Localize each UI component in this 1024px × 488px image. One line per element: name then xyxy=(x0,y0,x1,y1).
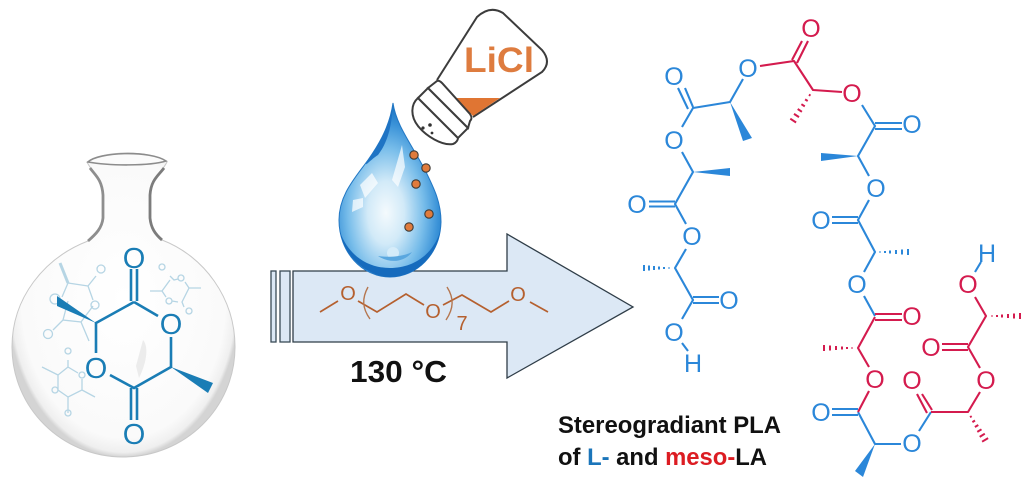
L-lactide blue segments: O xyxy=(682,223,702,251)
water droplet xyxy=(339,103,441,277)
meso-lactide red segments: O xyxy=(976,367,996,395)
meso-lactide red segments: O xyxy=(902,303,922,331)
polylactide chain structure xyxy=(627,15,1020,477)
L-lactide blue segments: O xyxy=(664,319,684,347)
meso-lactide red segments: O xyxy=(902,367,922,395)
LiCl particles xyxy=(405,151,433,231)
temperature label: 130 °C xyxy=(350,354,447,389)
L-lactide blue segments: O xyxy=(902,430,922,458)
PEG solvent structure: 7 xyxy=(456,313,468,335)
flask glass xyxy=(12,153,235,457)
meso-lactide red segments: O xyxy=(865,366,885,394)
L-lactide blue segments: O xyxy=(902,111,922,139)
L-lactide blue segments: O xyxy=(719,287,739,315)
meso-lactide red segments: O xyxy=(842,80,862,108)
main lactide molecule: O xyxy=(123,419,145,451)
caption: stereogradient PLA: of L- and meso-LA xyxy=(558,444,767,471)
L-lactide blue segments: O xyxy=(811,207,831,235)
caption: stereogradient PLA: Stereogradiant PLA xyxy=(558,412,781,439)
PEG solvent structure: O xyxy=(425,301,441,323)
caption: stereogradient PLA xyxy=(558,412,781,471)
faint lactide molecules xyxy=(42,263,201,416)
PEG solvent structure xyxy=(320,283,548,335)
main lactide molecule xyxy=(57,243,213,451)
meso-lactide red segments: O xyxy=(801,15,821,43)
LiCl salt shaker xyxy=(412,10,547,144)
PEG solvent structure: O xyxy=(340,283,356,305)
L-lactide blue segments: O xyxy=(664,63,684,91)
meso-lactide red segments: O xyxy=(958,271,978,299)
L-lactide blue segments: H xyxy=(978,240,996,268)
L-lactide blue segments: O xyxy=(627,191,647,219)
L-lactide blue segments: O xyxy=(847,271,867,299)
L-lactide blue segments: O xyxy=(738,55,758,83)
L-lactide blue segments: O xyxy=(811,399,831,427)
LiCl label: LiCl xyxy=(464,41,534,80)
L-lactide blue segments: O xyxy=(664,127,684,155)
L-lactide blue segments: H xyxy=(684,350,702,378)
meso-lactide red segments xyxy=(760,15,1020,442)
meso-lactide red segments: O xyxy=(921,334,941,362)
PEG solvent structure: O xyxy=(510,284,526,306)
main lactide molecule: O xyxy=(85,353,107,385)
L-lactide blue segments: O xyxy=(866,175,886,203)
main lactide molecule: O xyxy=(123,243,145,275)
main lactide molecule: O xyxy=(160,309,182,341)
L-lactide blue segments xyxy=(627,55,996,477)
reaction arrow xyxy=(271,234,633,378)
round-bottom flask with lactide xyxy=(12,153,235,457)
